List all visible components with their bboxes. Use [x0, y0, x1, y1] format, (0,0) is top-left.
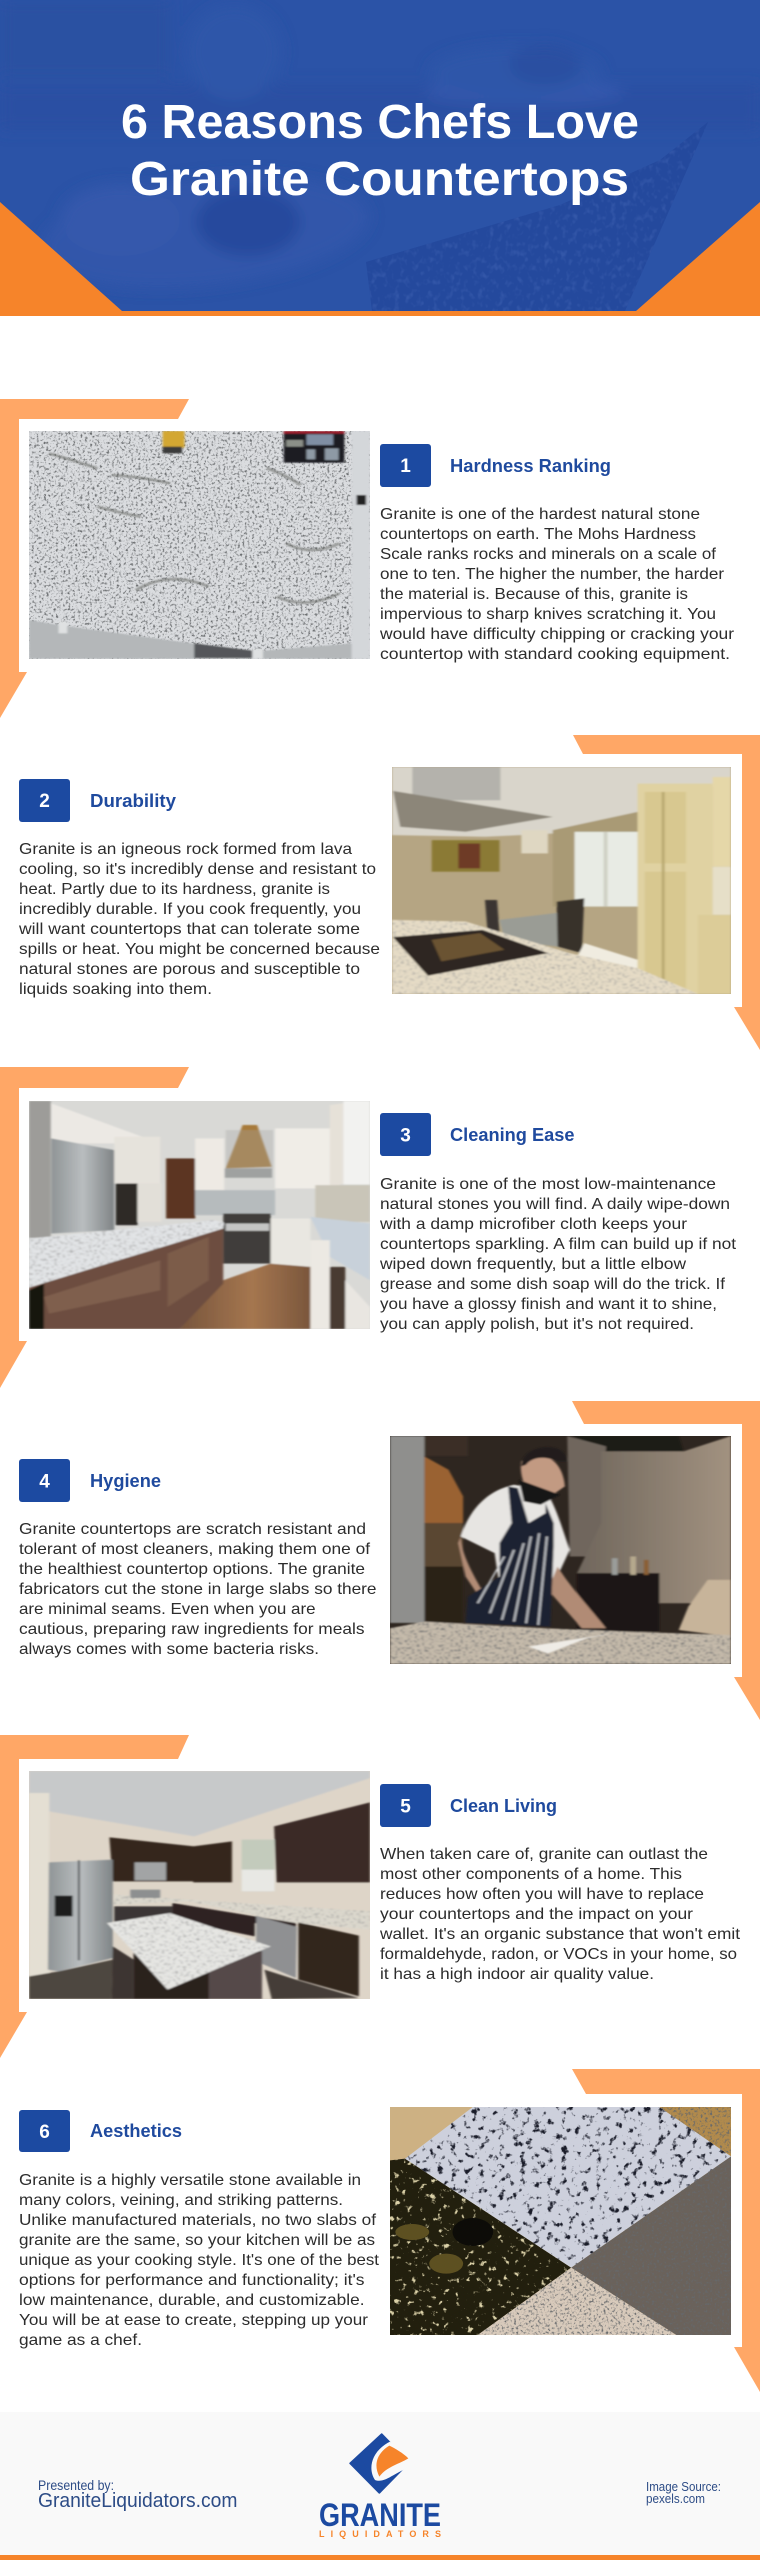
body text: liquids soaking into them. [19, 981, 212, 998]
body text: Granite is one of the most low-maintenance [380, 1176, 716, 1193]
logo wordmark: GRANITE [319, 2497, 441, 2533]
body text: you have a glossy finish and want it to shine, [380, 1296, 717, 1313]
body text: the healthiest countertop options. The granite [19, 1561, 365, 1578]
orange bracket [572, 2069, 760, 2392]
title: 6 Reasons Chefs Love [121, 96, 639, 149]
panel: 2 durability [18, 735, 760, 1050]
image source credit [646, 2479, 721, 2506]
body text: reduces how often you will have to replace [380, 1886, 704, 1903]
photo: chef working on granite counter [390, 1436, 731, 1664]
image source credit: Image Source: [646, 2479, 721, 2494]
panel: 6 aesthetics [19, 2069, 760, 2392]
body text [379, 1846, 741, 1983]
footer background [0, 2412, 760, 2555]
heading: Clean Living [450, 1796, 557, 1816]
orange bracket [572, 1401, 760, 1720]
photo: cream kitchen with cooktop [392, 767, 731, 994]
number badge [19, 2110, 70, 2152]
title: Granite Countertops [130, 153, 629, 206]
orange triangle right [636, 202, 760, 311]
body text: Granite is one of the hardest natural stone [380, 506, 700, 523]
body text: countertop with standard cooking equipment. [380, 646, 730, 663]
number badge [380, 1113, 431, 1156]
body text: incredibly durable. If you cook frequently, you [19, 901, 361, 918]
body text [19, 1521, 377, 1658]
body text: it has a high indoor air quality value. [380, 1966, 654, 1983]
header banner [0, 0, 760, 316]
panel: 3 cleaning ease [0, 1067, 737, 1388]
presented by credit: GraniteLiquidators.com [38, 2490, 238, 2512]
number badge: 1 [400, 456, 411, 477]
presented by credit: Presented by: [38, 2477, 114, 2493]
photo: kitchen with dark cabinets [29, 1771, 370, 1999]
number badge: 2 [39, 791, 50, 812]
body text: fabricators cut the stone in large slabs so there [19, 1581, 377, 1598]
orange triangle left [0, 202, 122, 311]
body text: natural stones are porous and susceptible to [19, 961, 360, 978]
body text: grease and some dish soap will do the trick. If [380, 1276, 726, 1293]
panel: 5 clean living [0, 1735, 741, 2058]
body text: countertops sparkling. A film can build up if not [380, 1236, 737, 1253]
body text: will want countertops that can tolerate some [18, 921, 360, 938]
body text: your countertops and the impact on your [380, 1906, 694, 1923]
body text [19, 2172, 380, 2349]
image source credit: pexels.com [646, 2491, 705, 2506]
body text: formaldehyde, radon, or VOCs in your home, so [380, 1946, 737, 1963]
icon: diamond mark [349, 2433, 408, 2494]
body text: many colors, veining, and striking patterns. [19, 2192, 343, 2209]
number badge [380, 1784, 431, 1827]
body text: are minimal seams. Even when you are [19, 1601, 316, 1618]
body text: impervious to sharp knives scratching it. You [380, 606, 716, 623]
body text: game as a chef. [19, 2332, 142, 2349]
number badge: 5 [400, 1796, 411, 1818]
photo: white kitchen with wood island [29, 1101, 370, 1329]
body text: spills or heat. You might be concerned because [19, 941, 380, 958]
body text: Granite is an igneous rock formed from lava [19, 841, 352, 858]
presented by credit [38, 2477, 238, 2512]
body text: Scale ranks rocks and minerals on a scale of [380, 546, 717, 563]
body text: cautious, preparing raw ingredients for meals [19, 1621, 364, 1638]
heading: Hygiene [90, 1471, 161, 1491]
body text: would have difficulty chipping or cracking your [379, 626, 735, 643]
orange bracket [573, 735, 760, 1050]
body text: low maintenance, durable, and customizable. [19, 2292, 364, 2309]
number badge: 3 [400, 1126, 411, 1146]
body text: cooling, so it's incredibly dense and resistant to [19, 861, 376, 878]
number badge [19, 1459, 70, 1502]
body text [18, 841, 380, 998]
footer [0, 2412, 760, 2560]
photo: granite samples [390, 2107, 731, 2335]
number badge: 4 [39, 1472, 50, 1492]
logo: granite liquidators [319, 2434, 441, 2539]
body text: You will be at ease to create, stepping up your [19, 2312, 369, 2329]
body text: countertops on earth. The Mohs Hardness [380, 526, 696, 543]
body text: Unlike manufactured materials, no two slabs of [19, 2212, 377, 2229]
orange footer bar [0, 2555, 760, 2560]
orange bar under header [0, 311, 760, 316]
body text [379, 506, 735, 663]
body text: always comes with some bacteria risks. [19, 1641, 319, 1658]
orange bracket [0, 1067, 189, 1388]
body text: granite are the same, so your kitchen will be as [19, 2232, 375, 2249]
heading: Aesthetics [90, 2121, 182, 2141]
body text: unique as your cooking style. It's one of the best [19, 2252, 380, 2269]
heading: Hardness Ranking [450, 456, 611, 476]
orange bracket [0, 1735, 189, 2058]
body text [379, 1176, 737, 1333]
body text: heat. Partly due to its hardness, granite is [19, 881, 330, 898]
heading: Durability [90, 791, 176, 811]
heading: Cleaning Ease [450, 1125, 574, 1145]
body text: with a damp microfiber cloth keeps your [379, 1216, 688, 1233]
number badge [380, 444, 431, 487]
body text: most other components of a home. This [380, 1866, 682, 1883]
body text: Granite countertops are scratch resistant and [19, 1521, 366, 1538]
body text: wiped down frequently, but a little elbow [379, 1256, 686, 1273]
body text: natural stones you will find. A daily wipe-down [380, 1196, 730, 1213]
body text: options for performance and functionality; it's [19, 2272, 364, 2289]
title [121, 96, 639, 206]
body text: wallet. It's an organic substance that won't emit [379, 1926, 741, 1943]
photo: granite slab [29, 431, 370, 659]
panel: 1 hardness ranking [0, 399, 735, 718]
body text: you can apply polish, but it's not required. [380, 1316, 694, 1333]
orange bracket [0, 399, 189, 718]
blue header background with faint kitchen photo [0, 0, 760, 311]
panel: 4 hygiene [19, 1401, 760, 1720]
number badge: 6 [39, 2122, 50, 2143]
logo tagline: LIQUIDATORS [319, 2529, 441, 2539]
body text: one to ten. The higher the number, the harder [380, 566, 725, 583]
number badge [19, 779, 70, 822]
body text: the material is. Because of this, granite is [380, 586, 688, 603]
body text: Granite is a highly versatile stone available in [19, 2172, 361, 2189]
body text: tolerant of most cleaners, making them one of [19, 1541, 371, 1558]
body text: When taken care of, granite can outlast the [380, 1846, 708, 1863]
